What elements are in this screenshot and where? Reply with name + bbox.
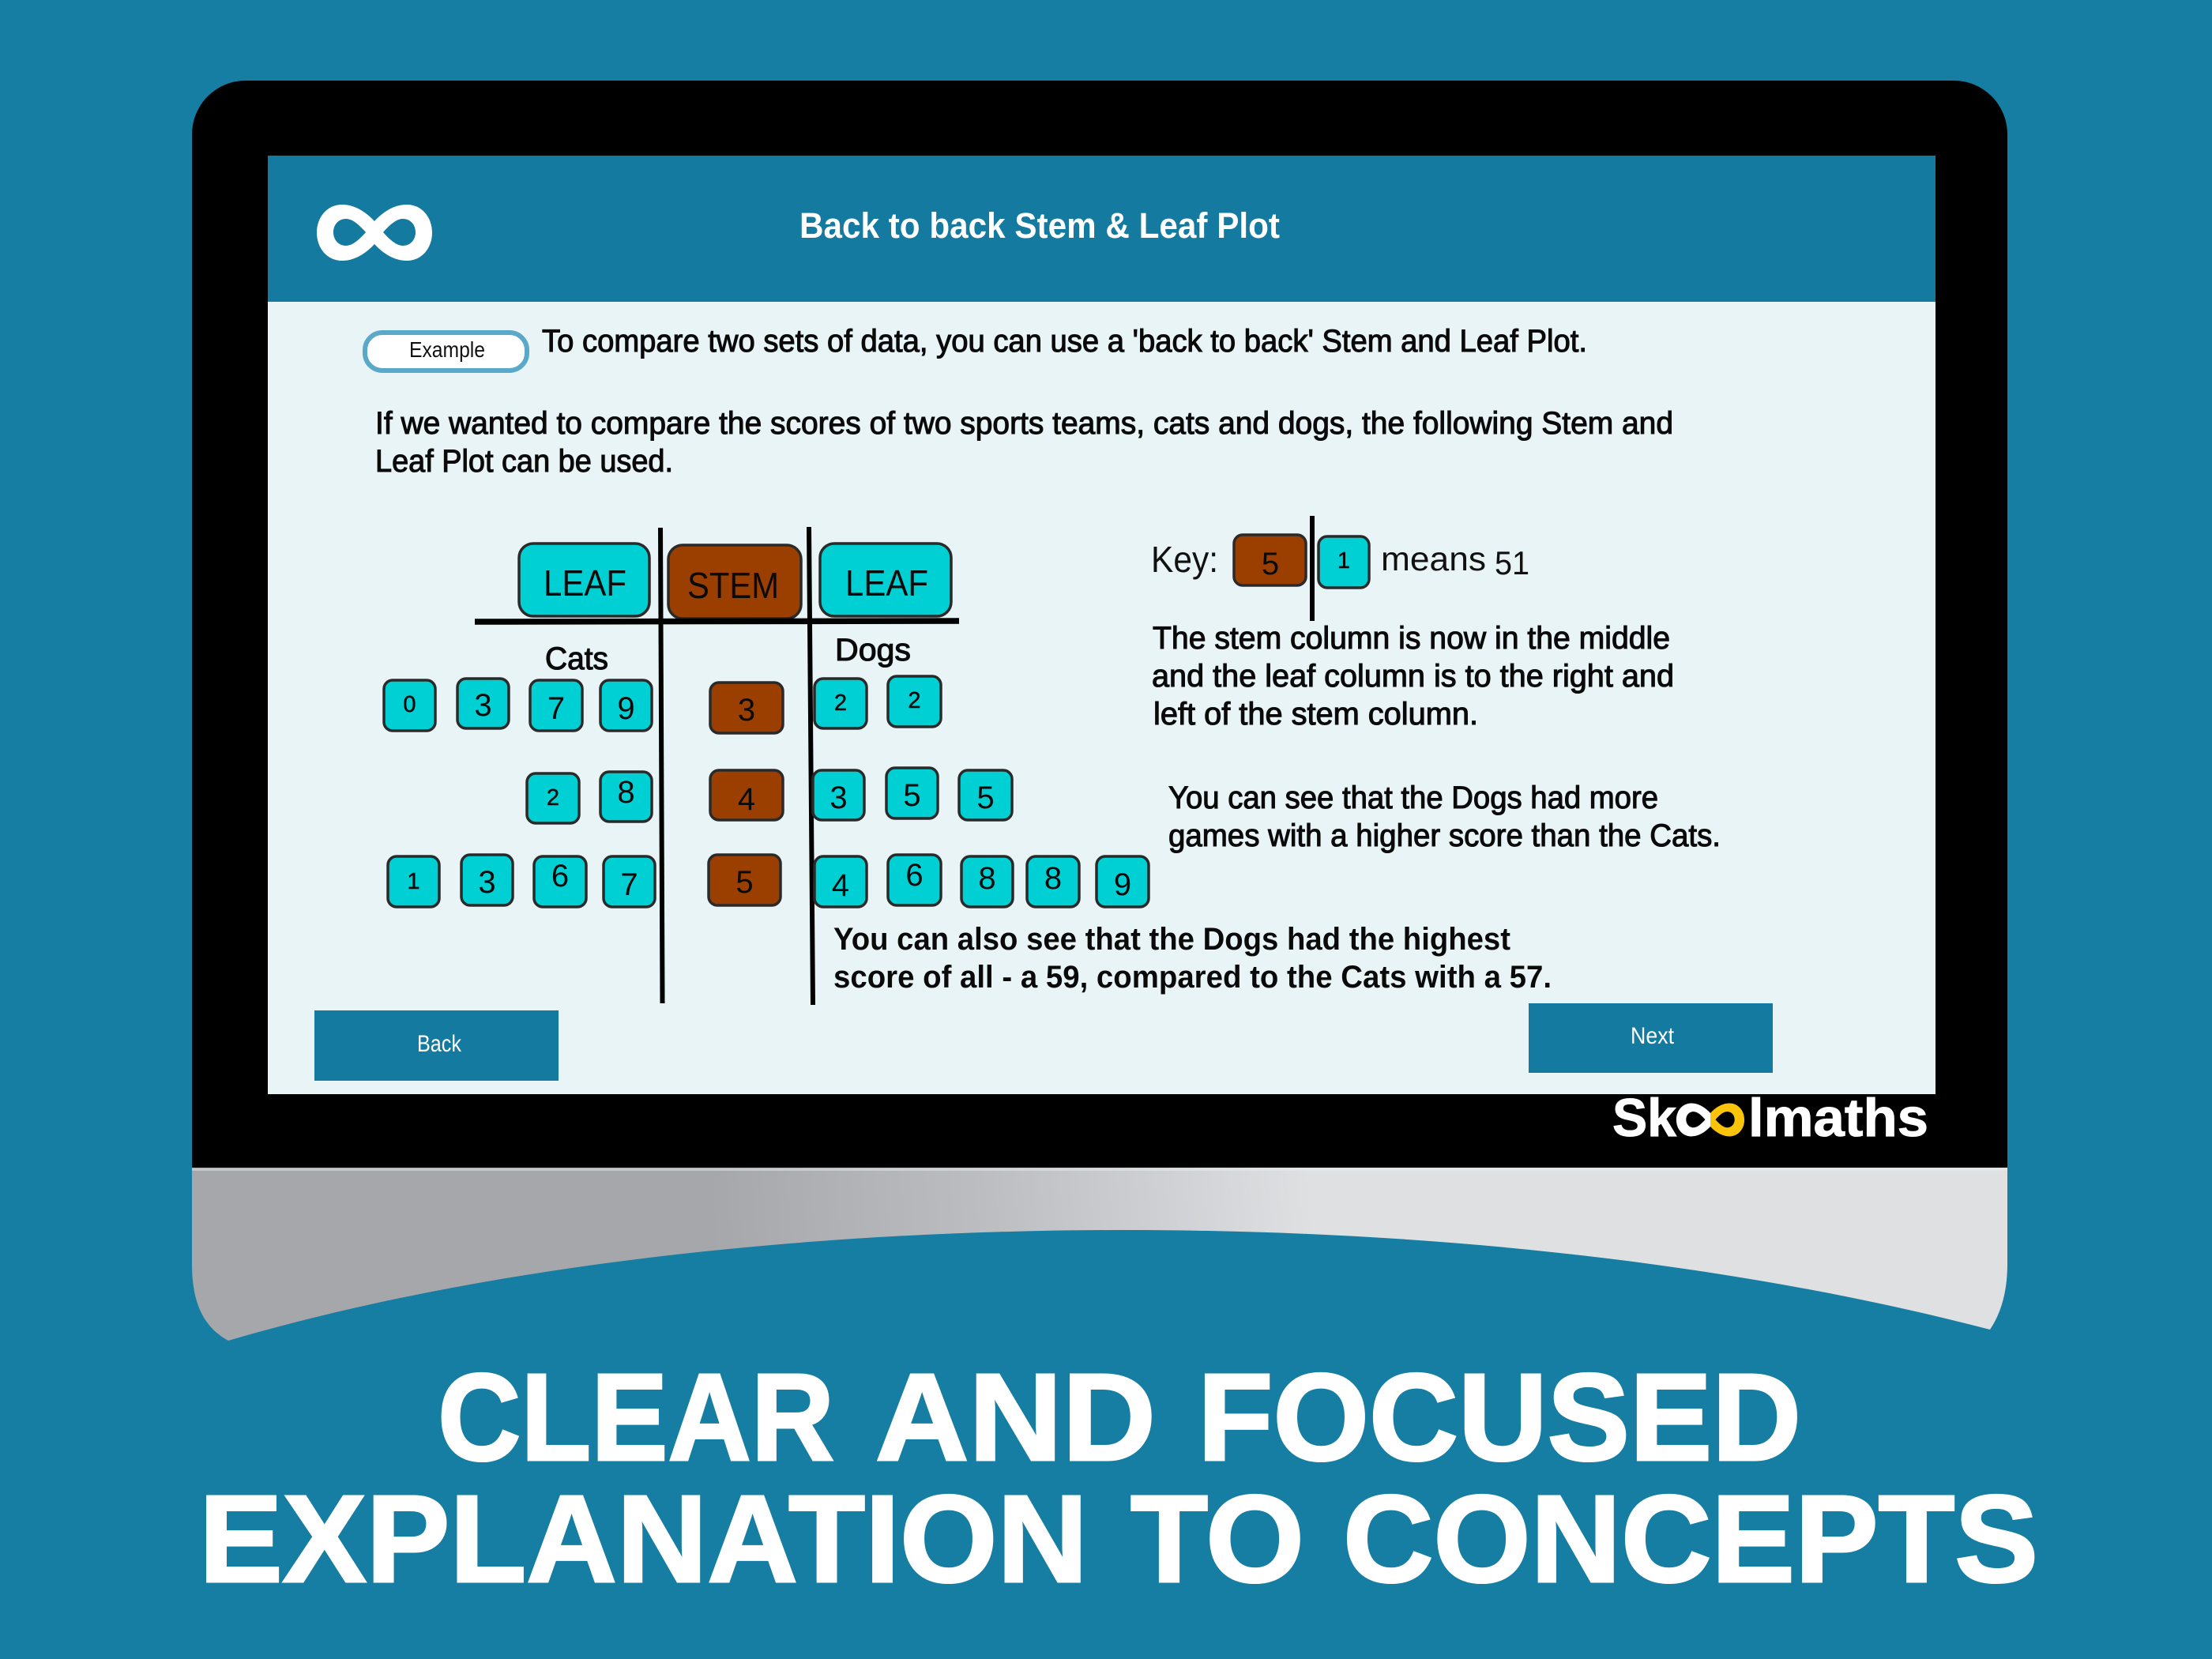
- screen title: Back to back Stem & Leaf Plot: [799, 205, 1280, 246]
- cats row 5 leaves: 3: [478, 865, 496, 900]
- screen header bar: [268, 156, 1936, 302]
- stem 5: 5: [735, 865, 754, 900]
- stem 5: [709, 855, 781, 905]
- dogs row 4 leaves: 5: [903, 778, 921, 813]
- intro paragraph: Leaf Plot can be used.: [375, 444, 673, 479]
- intro paragraph: [375, 406, 1673, 479]
- intro paragraph: If we wanted to compare the scores of two sports teams, cats and dogs, the following Stem and: [375, 406, 1673, 441]
- cats row 5 leaves: 6: [551, 859, 569, 893]
- dogs row 5 leaves: 4: [832, 868, 849, 903]
- cats row 3 leaves: 7: [547, 691, 565, 726]
- explanation: highest score: [833, 922, 1552, 995]
- headline: TO: [1130, 1470, 1304, 1608]
- header: leaf (dogs): LEAF: [845, 562, 928, 604]
- stem 4: 4: [738, 782, 755, 817]
- button: back: Back: [417, 1031, 462, 1057]
- explanation: stem column: and the leaf column is to the right and: [1152, 659, 1674, 694]
- cats row 3 leaves: 0: [403, 692, 416, 717]
- headline: EXPLANATION: [199, 1470, 1088, 1608]
- cats row 4 leaves: 8: [617, 775, 635, 810]
- dogs row 4 leaves: [813, 768, 1012, 820]
- button: back: [314, 1010, 559, 1081]
- key: [1151, 516, 1529, 621]
- key: 5: [1262, 547, 1279, 581]
- explanation: stem column: left of the stem column.: [1153, 697, 1478, 732]
- cats row 4 leaves: [527, 772, 652, 823]
- button: next: [1529, 1003, 1773, 1073]
- dogs row 5 leaves: [814, 855, 1149, 907]
- headline: AND: [875, 1349, 1156, 1487]
- dogs row 3 leaves: 2: [834, 690, 847, 716]
- example pill: Example: [409, 337, 485, 362]
- key: 1: [1337, 548, 1350, 574]
- cats row 5 leaves: [388, 855, 655, 907]
- monitor bezel: [192, 81, 2007, 1168]
- explanation: highest score: You can also see that the Dogs had the highest: [833, 922, 1510, 957]
- key: Key:: [1151, 539, 1218, 580]
- dogs row 4 leaves: 3: [830, 781, 848, 815]
- dogs row 5 leaves: 6: [905, 858, 924, 893]
- cats row 3 leaves: 3: [474, 688, 492, 723]
- label: dogs: Dogs: [835, 633, 911, 668]
- headline: [199, 1349, 2038, 1608]
- screen panel: [268, 156, 1936, 1094]
- key: means: [1381, 540, 1486, 578]
- button: next: Next: [1631, 1023, 1675, 1049]
- chart: back to back stem and leaf plot: [384, 527, 1149, 1005]
- explanation: stem column: [1152, 621, 1674, 732]
- cats row 5 leaves: 7: [620, 867, 638, 902]
- example pill: [365, 333, 527, 371]
- brand logo: Skoolmaths: lmaths: [1748, 1088, 1928, 1148]
- cats row 4 leaves: 2: [547, 785, 559, 811]
- brand logo: Skoolmaths: [1612, 1088, 1928, 1148]
- header: leaf (cats): [519, 544, 649, 616]
- explanation: dogs more games: [1168, 781, 1721, 853]
- cats row 5 leaves: 1: [407, 869, 420, 894]
- header: stem: [668, 545, 801, 619]
- headline: CLEAR: [438, 1349, 834, 1487]
- key: 51: [1495, 544, 1529, 581]
- headline: CONCEPTS: [1343, 1470, 2038, 1608]
- dogs row 3 leaves: [814, 676, 941, 728]
- stem 4: [710, 770, 783, 820]
- brand logo: Skoolmaths: Sk: [1612, 1088, 1676, 1148]
- icon: infinity logo: [317, 205, 432, 261]
- dogs row 5 leaves: 8: [978, 861, 996, 896]
- cats row 3 leaves: [384, 679, 652, 731]
- stem 3: [710, 683, 783, 733]
- plot axes: [475, 527, 959, 1005]
- header: stem: STEM: [687, 565, 779, 606]
- monitor stand: silver chin: [192, 1168, 2007, 1341]
- explanation: highest score: score of all - a 59, compared to the Cats with a 57.: [833, 960, 1552, 995]
- explanation: stem column: The stem column is now in the middle: [1153, 621, 1670, 656]
- intro sentence: To compare two sets of data, you can use a 'back to back' Stem and Leaf Plot.: [542, 324, 1587, 359]
- dogs row 4 leaves: 5: [976, 781, 995, 815]
- label: cats: Cats: [545, 641, 608, 676]
- explanation: dogs more games: games with a higher score than the Cats.: [1168, 818, 1721, 853]
- stem 3: 3: [738, 693, 755, 728]
- cats row 3 leaves: 9: [617, 691, 635, 726]
- dogs row 5 leaves: 9: [1114, 867, 1131, 902]
- explanation: dogs more games: You can see that the Dogs had more: [1168, 781, 1658, 815]
- dogs row 3 leaves: 2: [908, 688, 921, 713]
- header: leaf (cats): LEAF: [544, 562, 626, 604]
- headline: FOCUSED: [1198, 1349, 1801, 1487]
- dogs row 5 leaves: 8: [1044, 861, 1062, 896]
- header: leaf (dogs): [820, 544, 951, 616]
